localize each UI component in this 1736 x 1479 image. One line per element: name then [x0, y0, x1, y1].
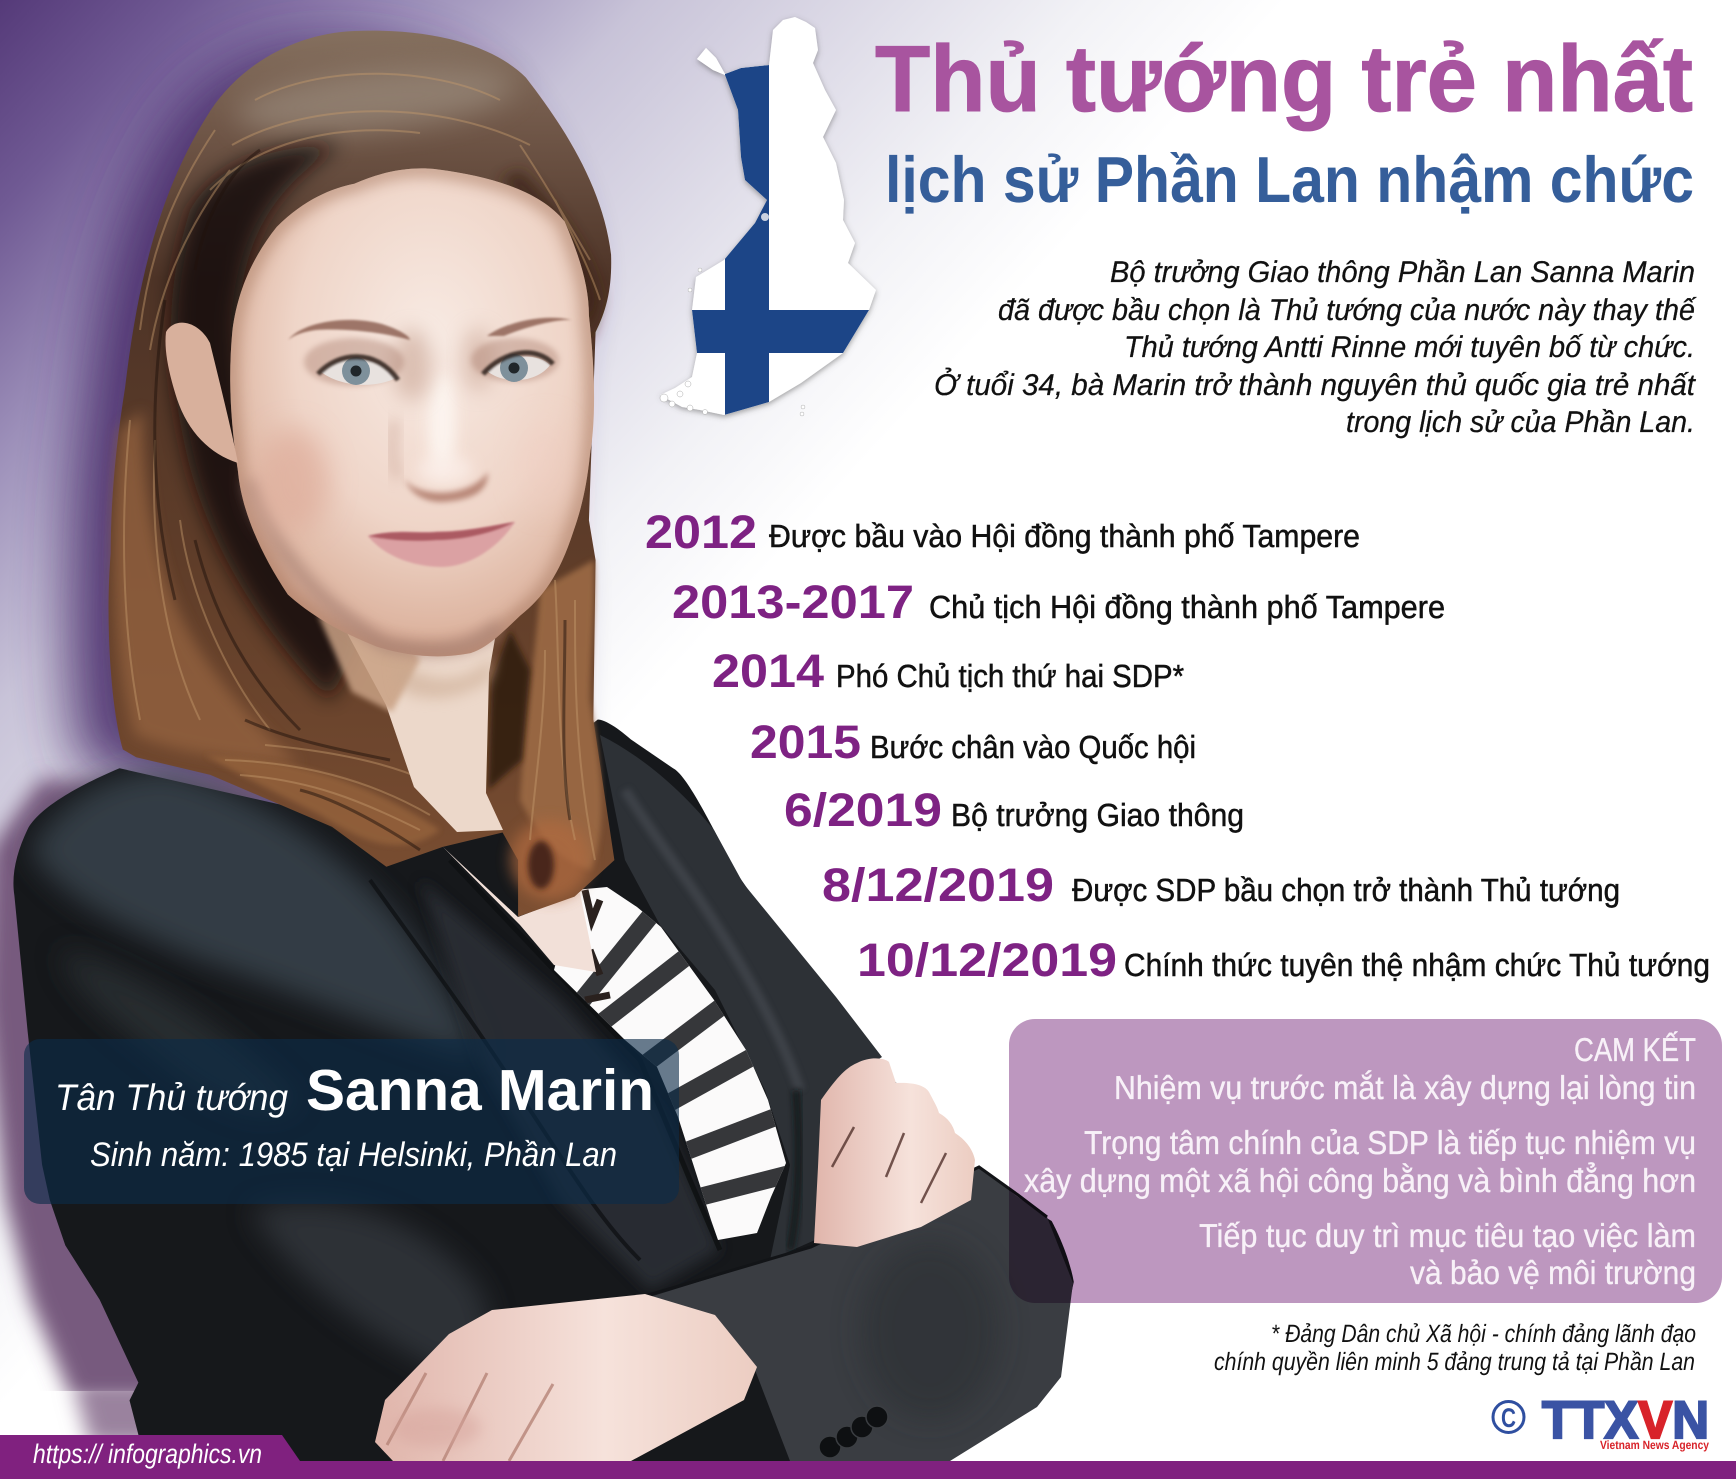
name caption text: Sinh năm: 1985 tại Helsinki, Phần Lan [90, 1136, 617, 1174]
portrait of Sanna Marin [13, 31, 1074, 1461]
intro text block: Ở tuổi 34, bà Marin trở thành nguyên thủ quốc gia trẻ nhất [934, 367, 1697, 402]
timeline entry 8/12/2019 [822, 858, 1620, 911]
name caption text [55, 1058, 654, 1174]
intro text block: Bộ trưởng Giao thông Phần Lan Sanna Marin [1110, 256, 1695, 289]
url text: https:// infographics.vn [33, 1439, 262, 1469]
timeline entry 2014: Phó Chủ tịch thứ hai SDP* [836, 658, 1184, 694]
timeline [645, 505, 1710, 986]
timeline entry 2014 [712, 644, 1184, 697]
left eyebrow [288, 320, 410, 340]
timeline entry 2012 [645, 505, 1360, 558]
person drop shadow [0, 45, 572, 1445]
mouth [368, 522, 515, 567]
timeline entry 8/12/2019: 8/12/2019 [822, 858, 1054, 911]
bottom purple bar [0, 1461, 1736, 1479]
panel: name caption background [24, 1039, 679, 1204]
right eye [471, 338, 559, 382]
timeline entry 2015 [750, 715, 1196, 768]
timeline entry 10/12/2019 [857, 933, 1710, 986]
timeline entry 6/2019: Bộ trưởng Giao thông [951, 797, 1244, 833]
agency tagline: Vietnam News Agency [1600, 1438, 1709, 1452]
timeline entry 2013-2017: 2013-2017 [672, 575, 914, 628]
commitments text: Tiếp tục duy trì mục tiêu tạo việc làm [1199, 1217, 1696, 1254]
jacket buttons [819, 1406, 888, 1458]
commitments text: Nhiệm vụ trước mắt là xây dựng lại lòng tin [1114, 1069, 1696, 1106]
intro text block: đã được bầu chọn là Thủ tướng của nước này thay thế [998, 294, 1697, 327]
commitments text: Trọng tâm chính của SDP là tiếp tục nhiệm vụ [1084, 1124, 1696, 1161]
title line 1: Thủ tướng trẻ nhất [875, 26, 1693, 131]
jacket [13, 720, 1074, 1461]
timeline entry 2015: 2015 [750, 715, 861, 768]
agency wordmark: TTXVN [1542, 1391, 1709, 1450]
name caption text: Tân Thủ tướng [55, 1077, 288, 1118]
timeline entry 2014: 2014 [712, 644, 824, 697]
title [875, 26, 1694, 216]
timeline entry 2013-2017: Chủ tịch Hội đồng thành phố Tampere [929, 589, 1445, 625]
ear [165, 323, 238, 463]
face [230, 168, 594, 656]
footnote [1214, 1320, 1696, 1376]
url tag shape [0, 1435, 300, 1461]
neck [318, 610, 503, 832]
commitments text [1024, 1031, 1696, 1291]
timeline entry 10/12/2019: Chính thức tuyên thệ nhậm chức Thủ tướng [1124, 947, 1710, 983]
icon: Finland map with flag [659, 16, 878, 420]
commitments text: và bảo vệ môi trường [1410, 1254, 1696, 1291]
intro text block [934, 256, 1697, 439]
striped shirt [554, 887, 786, 1240]
panel: commitments background [1009, 1019, 1722, 1303]
timeline entry 2012: Được bầu vào Hội đồng thành phố Tampere [769, 518, 1360, 554]
commitments text: CAM KẾT [1574, 1031, 1696, 1068]
copyright mark [1493, 1402, 1524, 1433]
timeline entry 10/12/2019: 10/12/2019 [857, 933, 1117, 986]
name caption text: Sanna Marin [306, 1058, 654, 1123]
chest skin [443, 847, 596, 972]
timeline entry 8/12/2019: Được SDP bầu chọn trở thành Thủ tướng [1072, 872, 1620, 908]
intro text block: Thủ tướng Antti Rinne mới tuyên bố từ chức. [1124, 331, 1695, 364]
timeline entry 2012: 2012 [645, 505, 757, 558]
timeline entry 6/2019: 6/2019 [784, 783, 942, 836]
upper hand [814, 1058, 975, 1247]
hair [109, 31, 614, 917]
timeline entry 2015: Bước chân vào Quốc hội [870, 729, 1196, 765]
timeline entry 6/2019 [784, 783, 1244, 836]
right eyebrow [487, 318, 572, 336]
intro text block: trong lịch sử của Phần Lan. [1346, 406, 1695, 439]
copyright mark: C [1501, 1403, 1516, 1433]
lower hand [375, 1294, 757, 1461]
left eye [304, 338, 404, 386]
timeline entry 2013-2017 [672, 575, 1445, 628]
logo: TTXVN [1493, 1391, 1709, 1452]
commitments text: xây dựng một xã hội công bằng và bình đẳng hơn [1024, 1162, 1696, 1199]
